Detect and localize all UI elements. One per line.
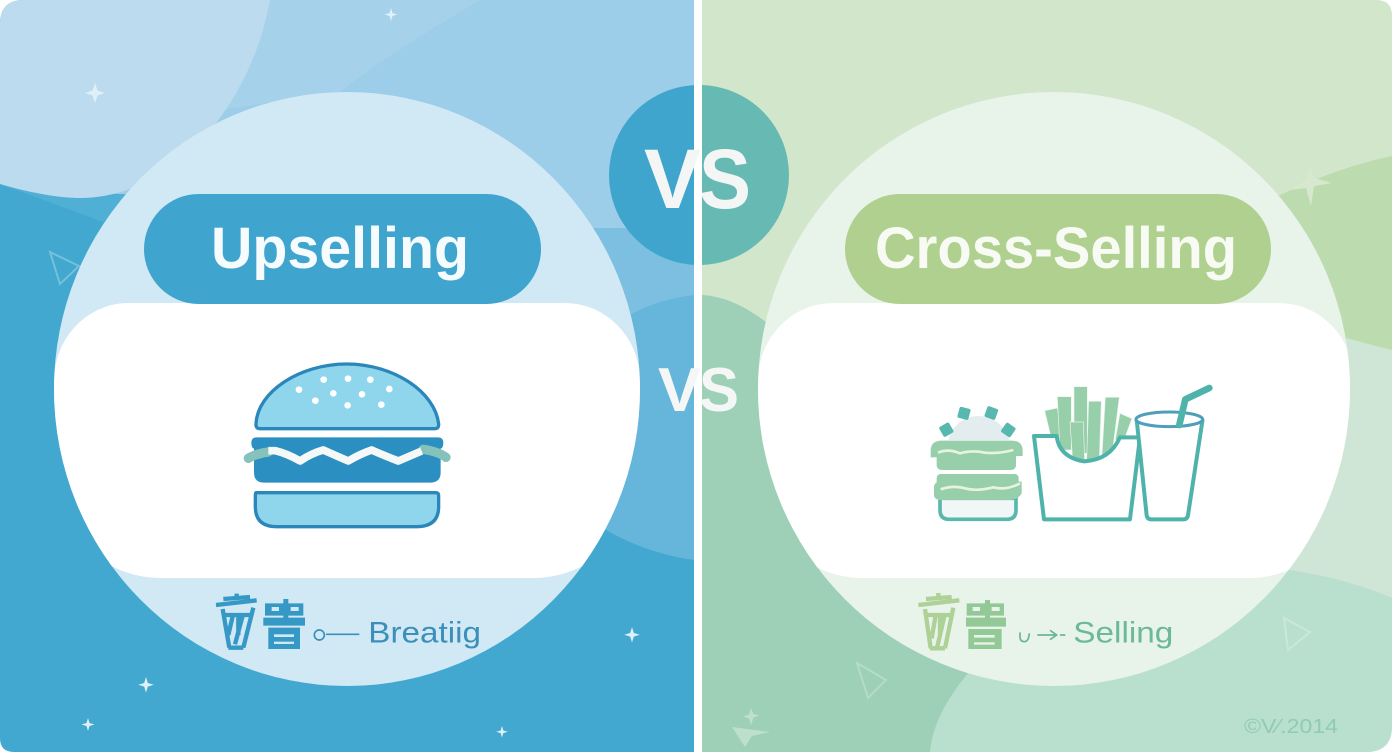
label: lower VS: V — [658, 356, 701, 425]
divider between panels — [694, 0, 702, 752]
icon: burger — [248, 364, 446, 527]
icon: block glyph — [966, 600, 1006, 649]
icon: tower glyph — [918, 593, 959, 648]
footer label: Breatiig — [216, 594, 481, 649]
heading: Cross-Selling — [845, 194, 1271, 304]
panel: upselling circle — [54, 92, 640, 686]
label: lower VS — [658, 356, 739, 425]
heading: Cross-Selling: Cross-Selling — [875, 216, 1237, 281]
panel: cross-selling background — [702, 0, 1392, 752]
panel: cross-selling circle — [758, 92, 1354, 686]
drink — [1137, 419, 1203, 519]
copyright note: ©V⁄.2014 — [1244, 716, 1338, 738]
icon: sparkles and triangles — [732, 164, 1332, 747]
white content card — [758, 303, 1354, 578]
footer label: Breatiig: Breatiig — [368, 616, 481, 649]
footer label: Selling: Selling — [1073, 616, 1173, 649]
icon: tower glyph — [216, 594, 257, 648]
fries — [1045, 387, 1132, 460]
badge: VS circle: S — [699, 132, 751, 226]
heading: Upselling: Upselling — [211, 216, 469, 281]
footer label: Selling — [918, 593, 1173, 649]
badge: VS circle: V — [644, 132, 701, 226]
icon: block glyph — [263, 599, 305, 649]
small burger — [931, 406, 1023, 519]
white content card — [54, 303, 640, 578]
label: lower VS: S — [699, 356, 739, 425]
panel: upselling background — [0, 0, 694, 752]
icon: burger, fries and drink — [931, 387, 1209, 519]
badge: VS circle — [609, 85, 789, 265]
heading: Upselling — [144, 194, 541, 304]
icon: sparkles and triangle — [50, 8, 640, 738]
